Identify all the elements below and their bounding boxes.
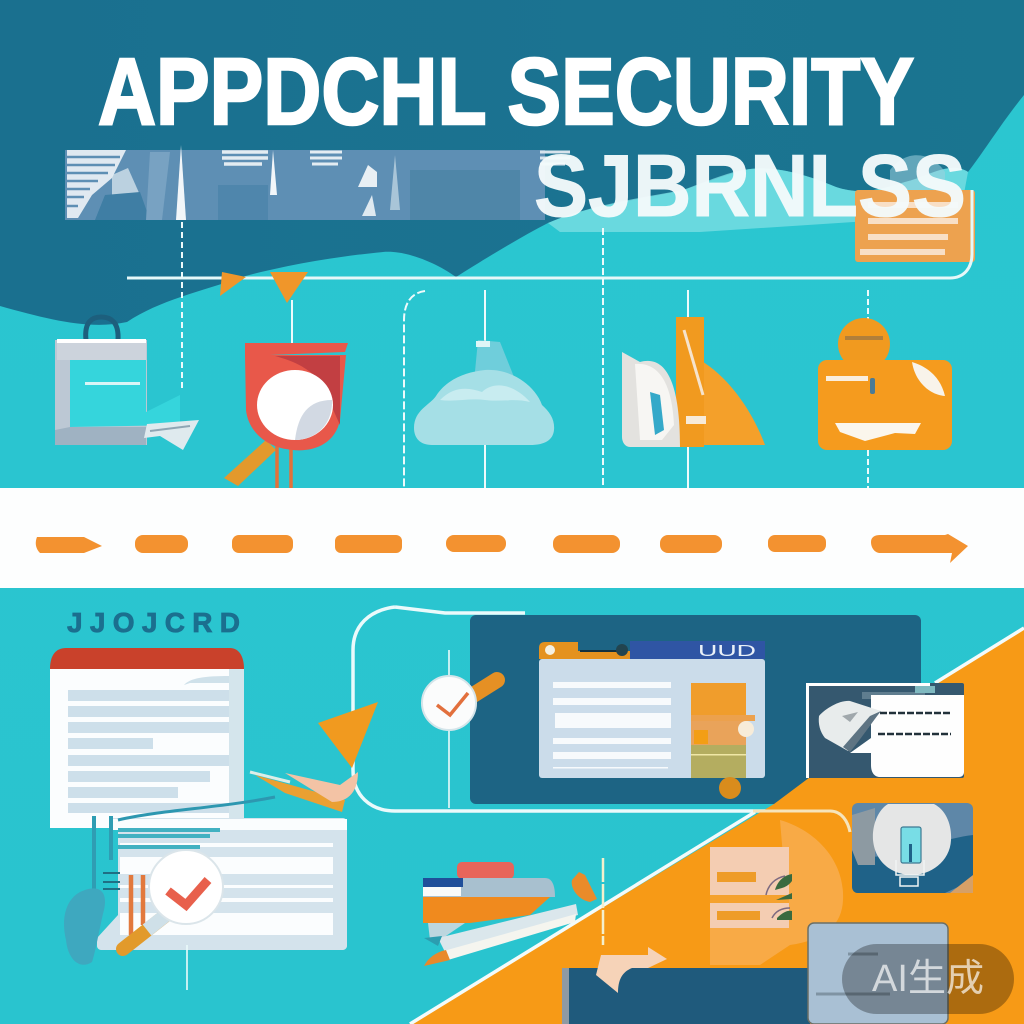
- watermark: [842, 944, 1014, 1014]
- arrow: orange pointers: [220, 272, 308, 303]
- arrow: orange triangle: [318, 702, 378, 768]
- panel: browser window: [539, 641, 765, 778]
- panel: dark dashboard: [470, 615, 921, 804]
- icon: cloud: [414, 340, 554, 445]
- connector: vertical line through check: [187, 650, 449, 990]
- connector: loop end over orange: [753, 811, 850, 832]
- panel: dark base block: [562, 968, 810, 1024]
- panel: report document: [50, 648, 244, 828]
- icon: orange figure: [818, 318, 952, 450]
- icon: small orange flag: [572, 872, 597, 902]
- watermark: AI生成: [872, 958, 984, 1000]
- connector: top rail: [127, 190, 972, 278]
- divider: white diagonal edge: [410, 628, 1024, 1024]
- connector: dashed vertical over diagonal: [602, 858, 604, 945]
- arrow: dashed orange timeline: [36, 534, 968, 563]
- panel: phone card: [852, 803, 973, 893]
- window heading: UUD: [698, 643, 756, 660]
- panel: checklist document: [64, 816, 347, 965]
- icon: red shield with lens: [224, 343, 348, 490]
- subtitle band: faded skyline: [65, 145, 570, 220]
- icon: document with orange tab: [622, 317, 765, 447]
- band: white divider: [0, 488, 1024, 588]
- panel: peach checklist: [710, 820, 843, 965]
- panel: iron card: [806, 683, 964, 778]
- arrow: peach double arrow: [596, 947, 667, 993]
- background: orange diagonal: [410, 628, 1024, 1024]
- icon: bag and laptop: [55, 317, 199, 450]
- icon: magnifier with check: [123, 850, 223, 949]
- hill highlight: [548, 168, 968, 232]
- subtitle: SJBRNLSS: [534, 136, 966, 235]
- header: dark sky with hill silhouette: [0, 0, 1024, 325]
- icon: stacked books and pens: [423, 862, 578, 966]
- panel: grey card: [808, 923, 948, 1024]
- icon: orange note, top right: [855, 155, 975, 262]
- icon: pencil and swoosh: [118, 772, 358, 820]
- icon: status dot: [719, 777, 741, 799]
- heading: lower section: JJOJCRD: [67, 607, 240, 638]
- icon: check badge: [422, 676, 497, 730]
- connector: vertical drop lines: [182, 222, 868, 490]
- connector: rounded loop: [353, 607, 850, 830]
